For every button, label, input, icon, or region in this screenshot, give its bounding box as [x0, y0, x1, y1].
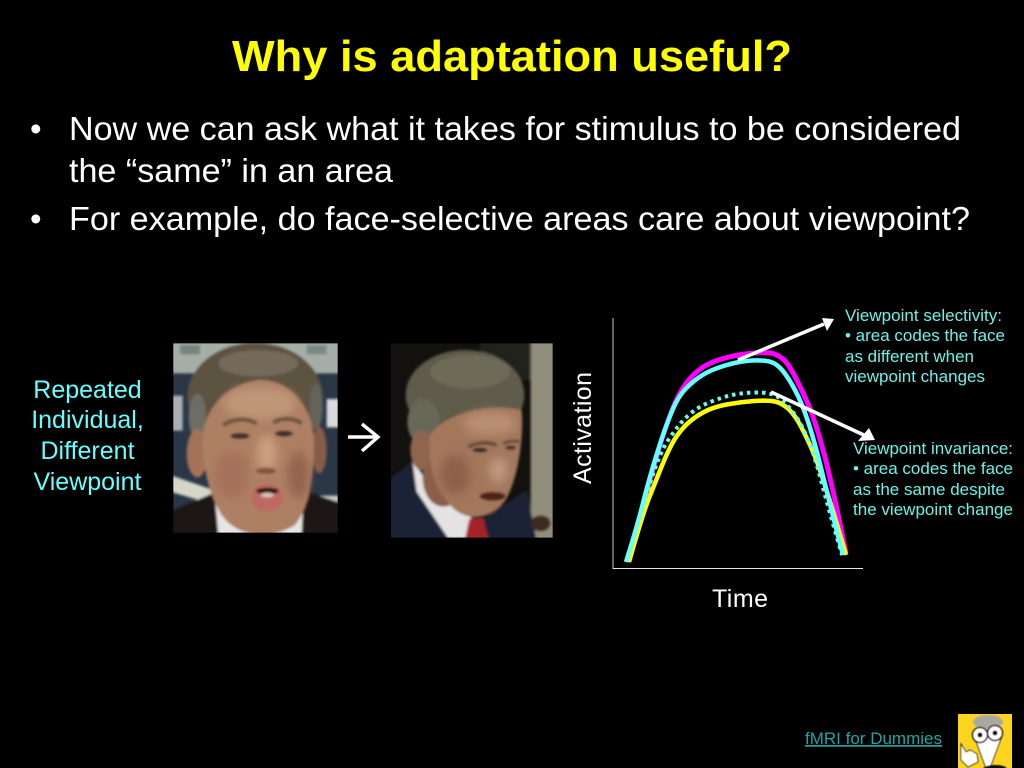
callout: viewpoint invariance: • area codes the face	[853, 459, 1013, 478]
callout: viewpoint invariance: the viewpoint change	[853, 500, 1013, 519]
callout: viewpoint invariance	[853, 439, 1013, 519]
condition label: Different	[40, 437, 135, 465]
callout: viewpoint selectivity: • area codes the face	[845, 326, 1005, 345]
bullet list: For example, do face-selective areas care about viewpoint?	[69, 200, 970, 237]
arrow between photos	[348, 424, 378, 451]
callout: viewpoint selectivity: viewpoint changes	[845, 367, 985, 386]
line chart	[569, 318, 875, 613]
curve: solid cyan	[626, 360, 843, 562]
callout: viewpoint invariance: as the same despite	[853, 480, 1005, 499]
callout: viewpoint selectivity	[845, 306, 1005, 386]
photo: face front view	[170, 340, 343, 538]
callout: viewpoint selectivity: Viewpoint selectivity:	[845, 306, 1002, 325]
x axis	[613, 568, 863, 570]
condition label: Repeated	[33, 376, 142, 404]
bullet list: •	[30, 200, 42, 237]
callout: viewpoint invariance: Viewpoint invariance:	[853, 439, 1013, 458]
bullet list	[30, 110, 970, 237]
y axis	[612, 318, 614, 569]
callout: viewpoint selectivity: as different when	[845, 347, 974, 366]
curve: yellow	[629, 401, 846, 562]
curve: magenta	[627, 353, 846, 562]
footer link: fMRI for Dummies	[805, 729, 942, 748]
photo: face three-quarter view	[387, 340, 557, 543]
bullet list: •	[30, 110, 42, 147]
title: Why is adaptation useful?	[232, 32, 792, 81]
condition label: Viewpoint	[34, 468, 142, 496]
axis label: time: Time	[712, 585, 768, 613]
bullet list: the “same” in an area	[69, 152, 394, 189]
axis label: activation: Activation	[569, 372, 597, 484]
icon: dummies mascot	[958, 714, 1012, 768]
condition label: Individual,	[31, 406, 144, 434]
bullet list: Now we can ask what it takes for stimulus to be considered	[69, 110, 961, 147]
curve: dotted cyan	[626, 392, 842, 562]
condition label	[31, 376, 144, 496]
arrow: invariance	[771, 392, 875, 441]
arrow: selectivity	[738, 318, 834, 360]
